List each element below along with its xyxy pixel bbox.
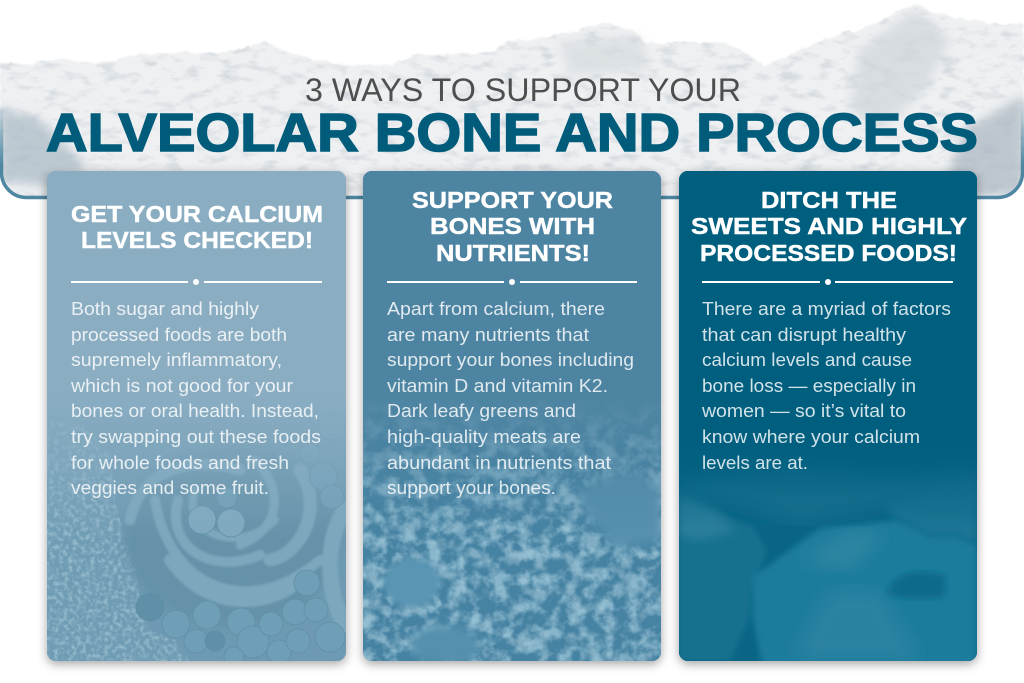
body text: for whole foods and fresh [71, 452, 289, 473]
heading: BONES WITH [430, 213, 595, 239]
body text: Both sugar and highly [71, 298, 260, 319]
heading: SUPPORT YOUR [412, 187, 613, 213]
body text: bone loss — especially in [702, 375, 916, 396]
body text: women — so it’s vital to [701, 400, 906, 421]
body text [387, 298, 634, 498]
body text: bones or oral health. Instead, [71, 400, 319, 421]
panel: ditch the sweets and highly processed foods [679, 171, 977, 670]
body text [701, 298, 951, 473]
body text: vitamin D and vitamin K2. [387, 375, 608, 396]
body text: Apart from calcium, there [387, 298, 605, 319]
body text: are many nutrients that [387, 324, 589, 345]
divider with dot [71, 279, 322, 285]
body text: know where your calcium [702, 426, 920, 447]
photo: leafy greens [363, 171, 661, 665]
heading [691, 187, 967, 266]
body text: high-quality meats are [387, 426, 581, 447]
heading [412, 187, 613, 266]
body text: supremely inflammatory, [71, 349, 282, 370]
title line: alveolar bone and process: ALVEOLAR BONE AND PROCESS [46, 103, 978, 163]
body text: abundant in nutrients that [387, 452, 611, 473]
body text: processed foods are both [71, 324, 287, 345]
heading: PROCESSED FOODS! [700, 240, 957, 266]
body text: support your bones including [387, 349, 634, 370]
panel: support your bones with nutrients [363, 171, 661, 665]
divider with dot [387, 279, 637, 285]
body text: support your bones. [387, 477, 556, 498]
heading: SWEETS AND HIGHLY [691, 213, 967, 239]
body text: There are a myriad of factors [702, 298, 951, 319]
header: snowy mountain panel [0, 4, 1024, 200]
heading: GET YOUR CALCIUM [71, 201, 323, 227]
body text: veggies and some fruit. [71, 477, 269, 498]
body text [70, 298, 321, 498]
heading: DITCH THE [761, 187, 897, 213]
body text: calcium levels and cause [702, 349, 912, 370]
divider with dot [702, 279, 953, 285]
photo: doughnuts [679, 171, 977, 670]
heading: LEVELS CHECKED! [81, 227, 313, 253]
heading [71, 201, 323, 253]
panel: get your calcium levels checked [47, 171, 346, 667]
title line: 3 ways to support your: 3 WAYS TO SUPPORT YOUR [305, 72, 741, 108]
heading: NUTRIENTS! [436, 240, 590, 266]
photo: pasta, peas and broccoli [47, 171, 346, 667]
body text: try swapping out these foods [71, 426, 321, 447]
body text: which is not good for your [70, 375, 293, 396]
body text: Dark leafy greens and [387, 400, 576, 421]
body text: that can disrupt healthy [702, 324, 907, 345]
body text: levels are at. [702, 452, 808, 473]
